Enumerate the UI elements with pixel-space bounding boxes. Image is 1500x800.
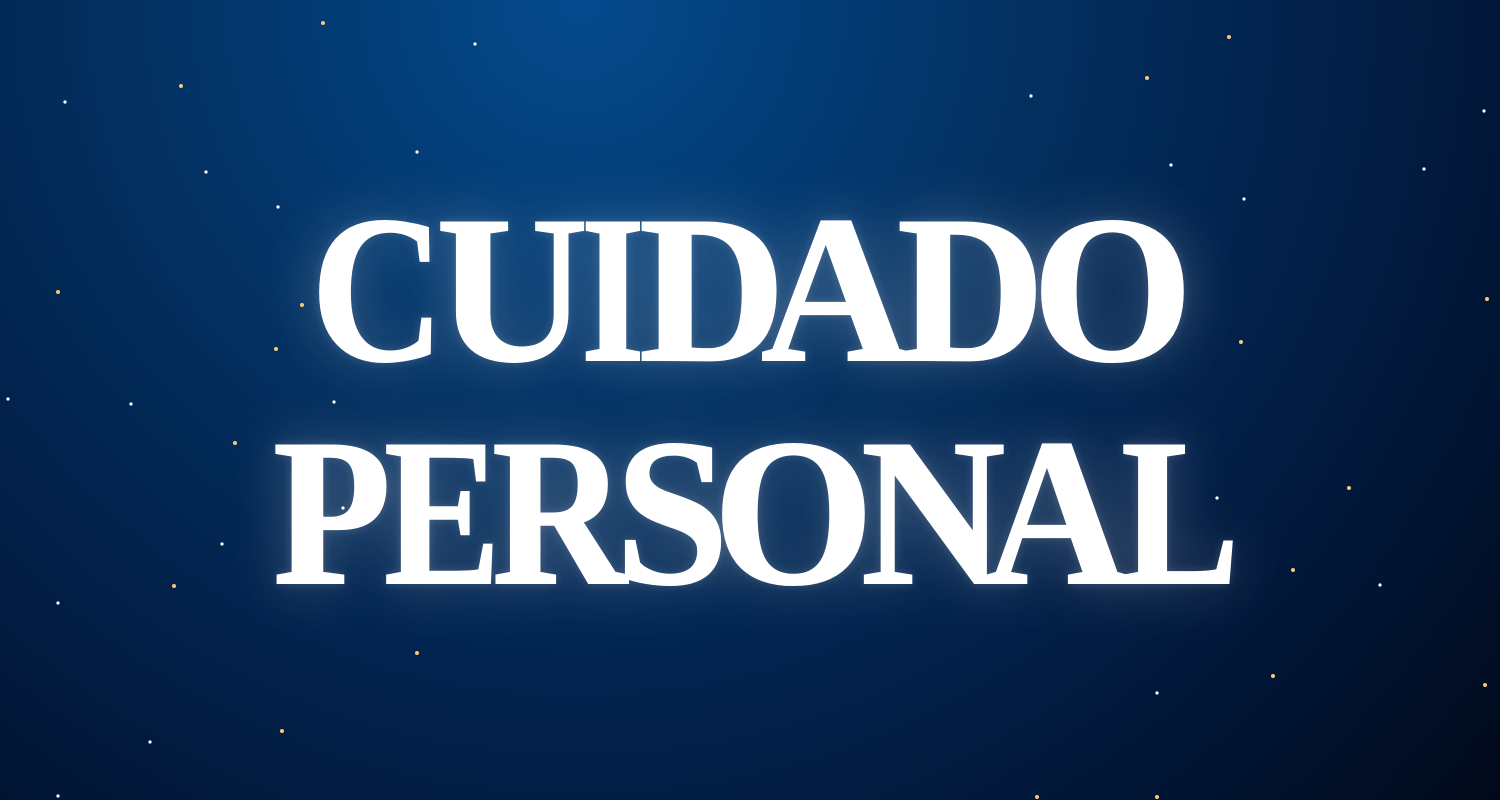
title line 1: CUIDADO: C bbox=[311, 173, 444, 406]
title line 2: PERSONAL: P bbox=[273, 396, 391, 629]
title line 2: PERSONAL: E bbox=[384, 396, 501, 629]
title line 1: CUIDADO: D bbox=[639, 173, 786, 406]
title line 2: PERSONAL: N bbox=[861, 397, 1005, 629]
title line 1: CUIDADO bbox=[311, 172, 1193, 406]
title line 2: PERSONAL bbox=[273, 396, 1239, 629]
title line 1: CUIDADO: D bbox=[897, 173, 1045, 406]
title line 1: CUIDADO: U bbox=[436, 172, 588, 406]
title line 2: PERSONAL: L bbox=[1121, 397, 1239, 629]
title line 2: PERSONAL: S bbox=[615, 396, 729, 629]
title line 1: CUIDADO: O bbox=[1032, 174, 1193, 406]
title line 1: CUIDADO: A bbox=[761, 174, 910, 406]
title line 1: CUIDADO: I bbox=[581, 173, 645, 406]
title line 2: PERSONAL: R bbox=[492, 396, 629, 628]
title line 2: PERSONAL: A bbox=[985, 397, 1128, 629]
title line 2: PERSONAL: O bbox=[713, 397, 874, 629]
